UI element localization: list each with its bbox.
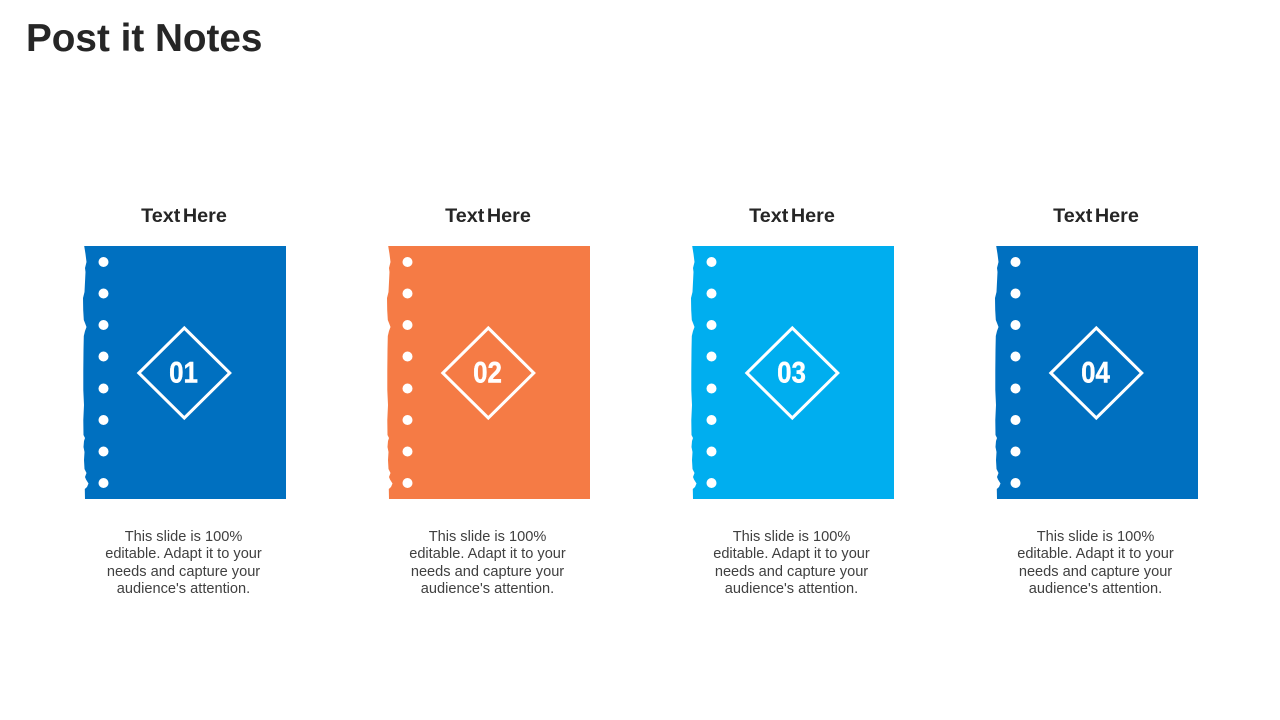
note 1 diamond [139, 328, 230, 418]
note 1 number: 01 [169, 356, 198, 389]
text block: note 1: needs and capture your [107, 564, 260, 580]
note 1 holes [98, 257, 108, 488]
heading: note 1: Text Here [141, 205, 227, 227]
note 1: blue [83, 246, 286, 499]
note 2 diamond [443, 328, 534, 418]
note 3: light blue [691, 246, 894, 499]
note 3 diamond [747, 328, 838, 418]
text block: note 4: editable. Adapt it to your [1017, 546, 1174, 562]
note 3 holes [706, 257, 716, 488]
text block: note 2: editable. Adapt it to your [409, 546, 566, 562]
text block: note 2: This slide is 100% [429, 528, 546, 544]
text block: note 2 [409, 528, 566, 597]
text block: note 2: needs and capture your [411, 564, 564, 580]
note 3 paper [691, 246, 894, 499]
text block: note 4: This slide is 100% [1037, 528, 1154, 544]
text block: note 3 [713, 528, 870, 597]
note 2: orange [387, 246, 590, 499]
text block: note 2: audience's attention. [421, 581, 554, 597]
note 2 number: 02 [473, 356, 502, 389]
title: Post it Notes [26, 17, 262, 60]
text block: note 1: editable. Adapt it to your [105, 546, 262, 562]
text block: note 4 [1017, 528, 1174, 597]
text block: note 1: This slide is 100% [125, 528, 242, 544]
text block: note 3: needs and capture your [715, 564, 868, 580]
note 4 holes [1010, 257, 1020, 488]
text block: note 4: audience's attention. [1029, 581, 1162, 597]
note 1 paper [83, 246, 286, 499]
heading: note 4: Text Here [1053, 205, 1139, 227]
text block: note 1: audience's attention. [117, 581, 250, 597]
note 2 paper [387, 246, 590, 499]
text block: note 4: needs and capture your [1019, 564, 1172, 580]
note 4 diamond [1051, 328, 1142, 418]
note 2 holes [402, 257, 412, 488]
text block: note 3: audience's attention. [725, 581, 858, 597]
note 3 number: 03 [777, 356, 806, 389]
heading: note 2: Text Here [445, 205, 531, 227]
text block: note 1 [105, 528, 262, 597]
note 4: blue [995, 246, 1198, 499]
heading: note 3: Text Here [749, 205, 835, 227]
note 4 paper [995, 246, 1198, 499]
note 4 number: 04 [1081, 356, 1110, 389]
text block: note 3: editable. Adapt it to your [713, 546, 870, 562]
text block: note 3: This slide is 100% [733, 528, 850, 544]
